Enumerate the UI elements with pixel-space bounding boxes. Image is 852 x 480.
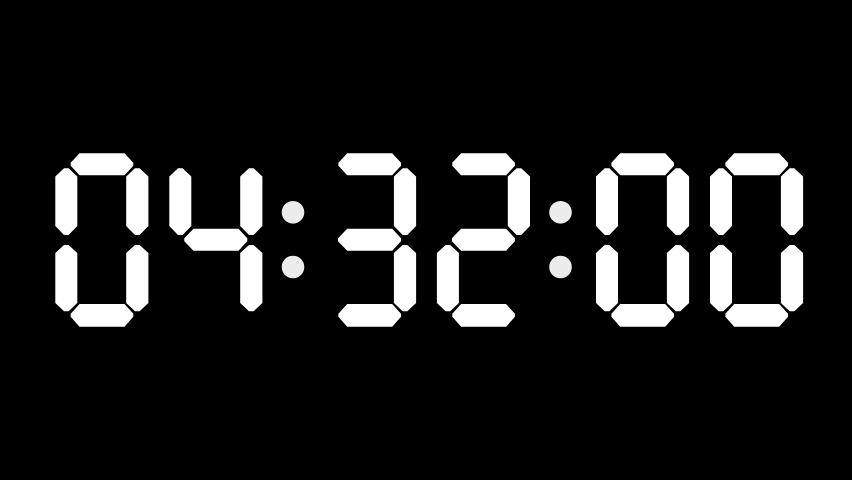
digit: minutes units 2 — [437, 153, 530, 327]
digit: hours units 4 — [169, 168, 262, 311]
digit: seconds tens 0 — [596, 153, 689, 327]
digit: hours tens 0 — [55, 153, 148, 327]
digit: seconds units 0 — [710, 153, 803, 327]
colon: minutes and seconds separator — [549, 201, 572, 278]
colon: hours and minutes separator — [282, 201, 304, 278]
digit: minutes tens 3 — [338, 153, 416, 327]
